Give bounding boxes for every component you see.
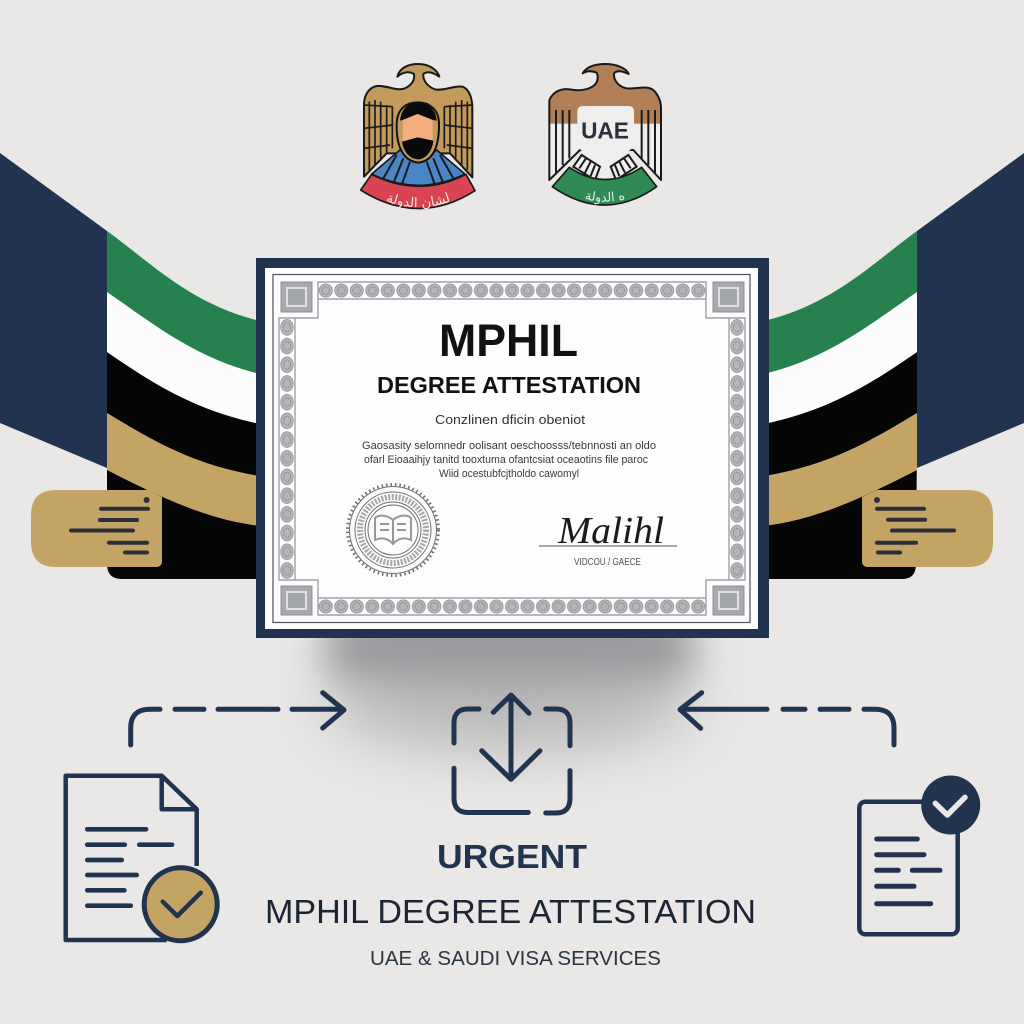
left emblem: eagle with face — [360, 63, 476, 210]
right dashed arrow — [680, 693, 894, 745]
right green stripe — [764, 231, 917, 374]
subheading: services: UAE & SAUDI VISA SERVICES — [370, 948, 661, 970]
navy check badge — [921, 776, 980, 834]
red banner — [361, 174, 475, 208]
right flag ribbon — [760, 153, 1024, 579]
shield label: UAE — [581, 117, 629, 143]
heading: urgent: URGENT — [437, 838, 587, 875]
left gold stripe — [107, 413, 260, 526]
banner script: لشان الدولة — [387, 192, 450, 210]
left black base — [107, 440, 270, 579]
certificate body text: Gaosasity selomnedr oolisant oeschoosss/tebnnosti an oldo — [362, 440, 656, 452]
certificate body text: ofarl Eioaaihjy tanitd tooxtuma ofantcsiat oceaotins file paroc — [364, 454, 648, 466]
certificate body text — [362, 440, 656, 480]
seal — [348, 484, 438, 576]
green banner — [552, 167, 657, 205]
left flag ribbon — [0, 153, 270, 579]
certificate title: MPHIL — [439, 315, 578, 366]
left document icon — [66, 776, 217, 941]
ornamental border — [279, 282, 745, 615]
left gold tab with text lines — [31, 490, 162, 567]
right gold tab with text lines — [862, 490, 993, 567]
certificate — [256, 258, 769, 638]
right gold stripe — [764, 413, 917, 526]
left green stripe — [107, 231, 260, 374]
left white stripe — [107, 292, 260, 424]
arrows — [508, 697, 514, 779]
certificate shadow — [325, 610, 695, 750]
right navy panel — [917, 153, 1024, 468]
right black base — [760, 440, 917, 579]
right white stripe — [764, 292, 917, 424]
head shield — [397, 102, 439, 163]
wing feathers — [556, 110, 655, 173]
eagle body — [364, 64, 472, 177]
left black stripe — [107, 352, 260, 476]
claws — [573, 155, 637, 180]
left dashed arrow — [131, 693, 344, 745]
wing feathers — [364, 100, 472, 170]
text lines — [87, 829, 172, 906]
certificate small heading: Conzlinen dficin obeniot — [435, 413, 586, 427]
gold check badge — [144, 868, 217, 941]
left navy panel — [0, 153, 107, 468]
corner ornaments — [281, 282, 744, 615]
right document icon — [859, 776, 980, 934]
certificate body text: Wiid ocestubfcjtholdo cawomyl — [439, 468, 579, 480]
eagle body — [549, 64, 661, 180]
signature caption: VIDCOU / GAECE — [574, 557, 641, 568]
heading: mphil degree attestation: MPHIL DEGREE ATTESTATION — [265, 893, 756, 930]
blue chest — [372, 150, 465, 185]
shield — [577, 106, 634, 182]
right black stripe — [764, 352, 917, 476]
corner brackets — [454, 709, 479, 743]
certificate subtitle: DEGREE ATTESTATION — [377, 372, 641, 398]
certificate frame — [256, 258, 769, 638]
center transfer icon — [454, 695, 570, 813]
right emblem: eagle with UAE shield — [548, 63, 662, 206]
text lines — [877, 839, 940, 904]
signature: Malihl — [557, 510, 664, 552]
banner script: ه الدولة — [586, 191, 624, 204]
